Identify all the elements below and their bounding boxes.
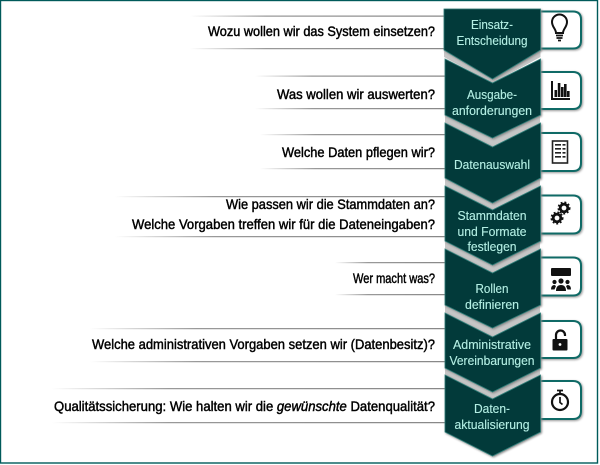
chevron 1 — [444, 9, 540, 79]
chevron 7 label — [454, 401, 530, 432]
chevron 6 label — [450, 337, 534, 368]
icon tab 2 — [536, 72, 581, 109]
question 4: Wie passen wir die Stammdaten an? — [226, 196, 435, 212]
icon tab 7 — [536, 381, 581, 419]
chevron 3 — [445, 123, 540, 203]
chevron 4 label — [458, 208, 526, 254]
chevron 6 shadow — [445, 368, 540, 399]
question 7: Qualitätssicherung: Wie halten wir die gewünschte Datenqualität? — [54, 398, 435, 414]
step 3: Datenauswahl — [260, 123, 581, 210]
question 2: Was wollen wir auswerten? — [277, 86, 435, 102]
icon: open padlock — [552, 330, 568, 350]
chevron 6 label: Administrative — [453, 337, 531, 352]
question 7 rule lines — [52, 388, 445, 423]
icon tab 1 — [536, 12, 581, 48]
icon tab 5 — [536, 258, 581, 296]
chevron 2 label: anforderungen — [452, 103, 532, 118]
icon: gears — [551, 202, 570, 224]
chevron 2 label — [452, 87, 532, 118]
question 1: Wozu wollen wir das System einsetzen? — [208, 23, 435, 39]
chevron 2 label: Ausgabe- — [467, 87, 517, 102]
icon: team at a screen — [551, 268, 571, 291]
step 6: Administrative Vereinbarungen — [90, 313, 581, 399]
chevron 5 label — [465, 281, 519, 312]
question 3: Welche Daten pflegen wir? — [282, 144, 435, 160]
chevron 4 label: Stammdaten — [458, 208, 526, 223]
question 4: Welche Vorgaben treffen wir für die Dateneingaben? — [132, 216, 435, 232]
step 2: Ausgabeanforderungen — [255, 59, 581, 147]
chevron 7 label: aktualisierung — [454, 417, 530, 432]
question 6 rule lines — [90, 328, 445, 362]
chevron 1 label: Einsatz- — [471, 17, 513, 32]
chevron 6 label: Vereinbarungen — [450, 353, 534, 368]
chevron 4 shadow — [445, 241, 540, 273]
chevron 2 — [445, 59, 540, 138]
chevron 5 label: Rollen — [476, 281, 508, 296]
step 7: Datenaktualisierung — [52, 375, 581, 456]
chevron 1 label: Entscheidung — [456, 33, 528, 48]
chevron 5 label: definieren — [465, 297, 519, 312]
question 1 rule lines — [190, 16, 445, 49]
chevron 4 label: festlegen — [468, 239, 516, 254]
chevron 1 label — [456, 17, 528, 48]
chevron 5 — [445, 249, 540, 328]
question 4 rule lines — [115, 196, 445, 237]
question 5: Wer macht was? — [353, 270, 435, 286]
icon: bar chart — [551, 81, 570, 100]
icon: stopwatch — [552, 390, 568, 410]
chevron 7 label: Daten- — [474, 401, 510, 416]
step 4: Stammdaten und Formate festlegen — [115, 186, 581, 273]
question 6: Welche administrativen Vorgaben setzen wir (Datenbesitz)? — [92, 336, 435, 352]
chevron 1 shadow — [444, 50, 540, 83]
chevron 5 shadow — [445, 305, 540, 337]
chevron 4 label: und Formate — [458, 224, 526, 239]
question 4 — [132, 196, 435, 232]
step 5: Rollen definieren — [335, 249, 581, 337]
step 1: Einsatz-Entscheidung — [190, 9, 581, 83]
chevron 3 shadow — [445, 178, 540, 210]
chevron 7 — [445, 375, 540, 456]
icon: light bulb — [552, 14, 567, 40]
chevron 6 — [445, 313, 540, 392]
icon: data list — [552, 141, 568, 163]
question 2 rule lines — [255, 76, 445, 109]
icon tab 4 — [536, 196, 581, 234]
question 3 rule lines — [260, 134, 445, 169]
question 5 rule lines — [335, 262, 445, 295]
icon tab 6 — [536, 321, 581, 358]
chevron 3 label: Datenauswahl — [454, 157, 530, 172]
chevron 2 shadow — [445, 115, 540, 147]
chevron 4 — [445, 186, 540, 265]
icon tab 3 — [536, 133, 581, 171]
